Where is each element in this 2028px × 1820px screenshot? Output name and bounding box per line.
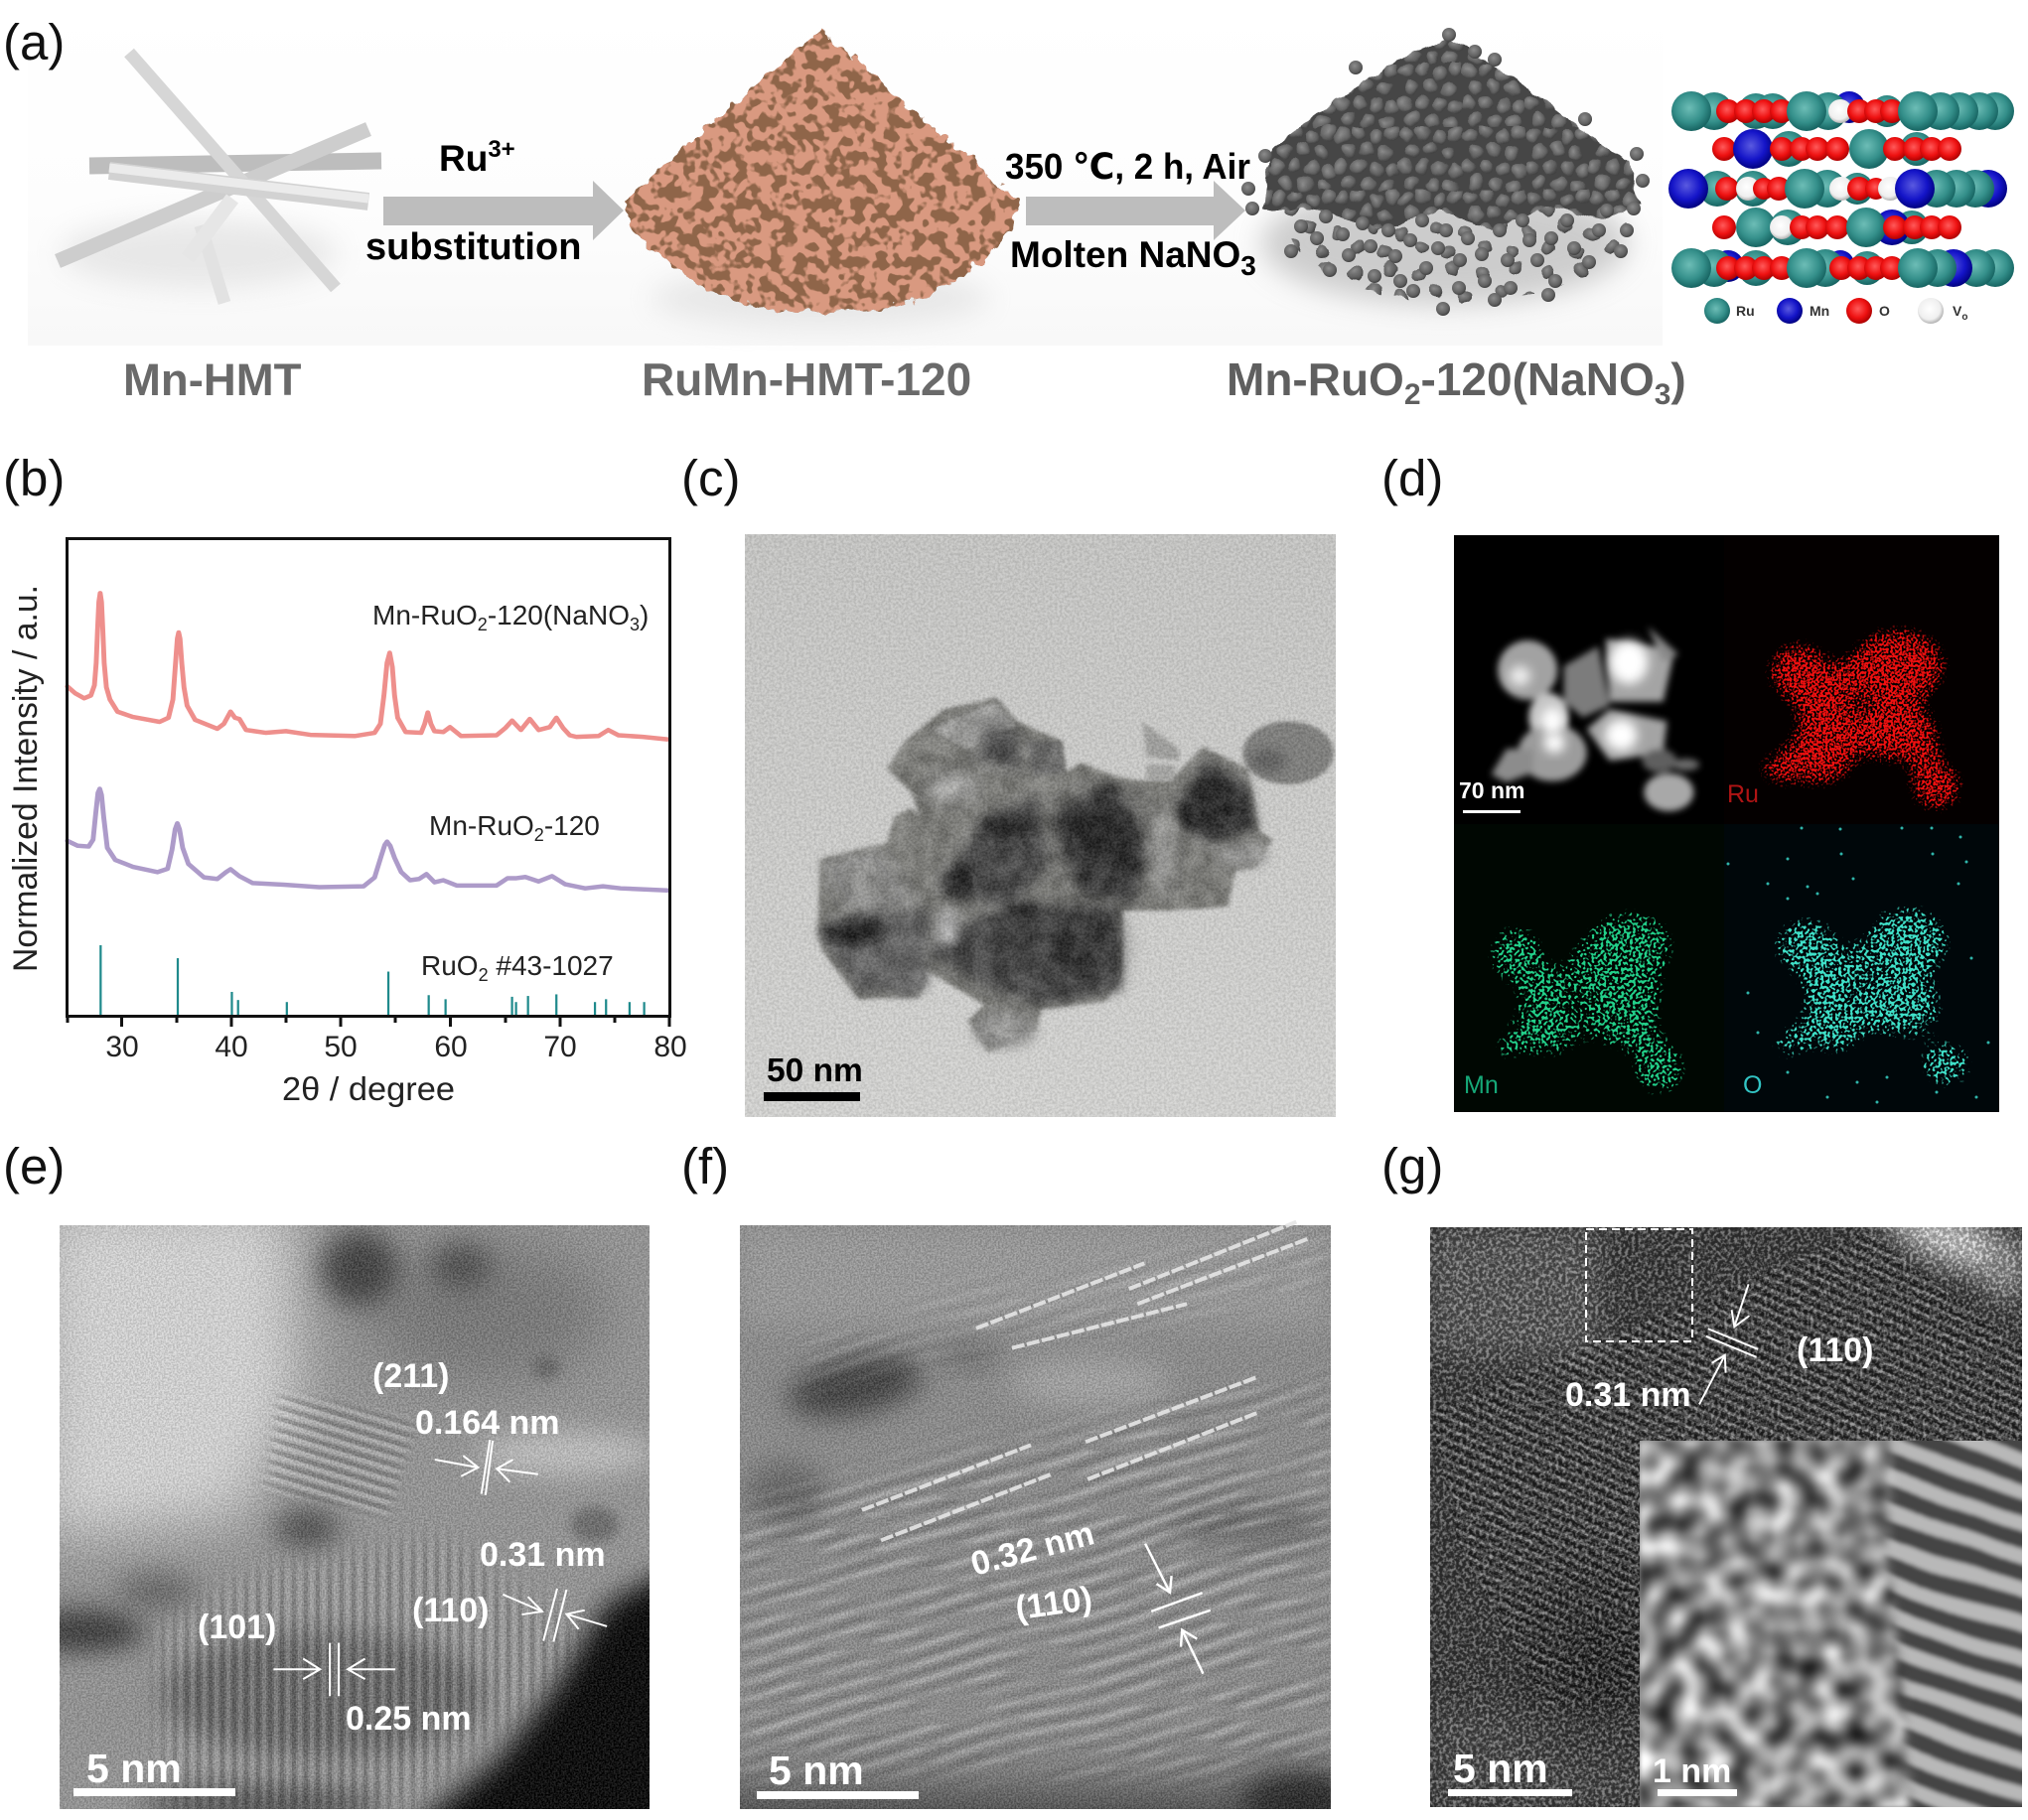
title: RuMn-HMT-120: RuMn-HMT-120 <box>642 353 971 405</box>
series label: Mn-RuO2-120(NaNO3): Mn-RuO <box>372 600 478 630</box>
panel d: elemental mapping <box>1381 450 1999 1112</box>
scale bar: 1 nm: 1 nm <box>1653 1752 1731 1790</box>
label: Molten NaNO3: Molten NaNO <box>1010 234 1240 275</box>
series label: Mn-RuO2-120(NaNO3): ) <box>640 600 649 630</box>
series label: RuO2 #43-1027: 2 <box>479 965 489 985</box>
dark sample edge <box>405 1559 650 1809</box>
annotation: 211 lattice <box>372 1357 560 1495</box>
legend: atoms: V <box>1953 303 1961 319</box>
x axis title: 2θ / degree <box>282 1070 455 1107</box>
map background tints <box>1724 535 1999 824</box>
series label: RuO2 #43-1027: RuO <box>421 950 479 981</box>
annotation: 211 lattice: (211) <box>372 1357 449 1395</box>
panel label f: (f) <box>681 1138 729 1194</box>
panel f: HRTEM image <box>684 1147 1331 1809</box>
lattice fringes <box>740 1384 1331 1781</box>
scale bar: 50 nm: 50 nm <box>767 1052 863 1089</box>
x axis tick labels: 70 <box>543 1031 577 1063</box>
annotation: 110 lattice: 0.31 nm <box>480 1536 606 1574</box>
arrow: calcination <box>1026 181 1245 240</box>
panel label b: (b) <box>3 450 65 506</box>
row 4 <box>1712 208 1961 247</box>
title: Mn-HMT: Mn-HMT <box>123 354 302 405</box>
O map <box>1770 905 1974 1088</box>
arrow: substitution <box>383 181 624 240</box>
legend: atoms: Mn <box>1810 303 1829 319</box>
HRTEM micrograph <box>60 1225 650 1809</box>
scale bar: 5 nm <box>757 1748 919 1799</box>
scale bar: 5 nm: 5 nm <box>769 1748 864 1793</box>
panel e: HRTEM image <box>3 1138 696 1820</box>
row 3 <box>1668 169 2007 209</box>
row 1 <box>1671 91 2014 131</box>
title: Mn-RuO2-120(NaNO3): ) <box>1670 353 1686 405</box>
series label: Mn-RuO2-120: 2 <box>534 825 544 845</box>
annotation: 110 lattice: (110) <box>412 1592 489 1629</box>
y axis title: Normalized Intensity / a.u. <box>7 585 45 972</box>
label: Molten NaNO3: 3 <box>1240 250 1256 281</box>
label: Ru3+: Ru <box>439 138 488 179</box>
legend: atoms: Ru <box>1736 303 1755 319</box>
label: Ru3+: 3+ <box>488 136 515 163</box>
legend: atoms: o <box>1961 312 1967 323</box>
panel label d: (d) <box>1381 450 1443 506</box>
scattered O dots <box>1726 826 1990 1104</box>
annotation: 0.32 nm: 0.32 nm <box>967 1514 1098 1584</box>
series label: Mn-RuO2-120(NaNO3): 2 <box>478 615 488 634</box>
map label: Mn: Mn <box>1464 1071 1499 1099</box>
reference sticks: RuO2 <box>100 945 645 1017</box>
label: 350 C, 2 h, Air: 350 ℃, 2 h, Air <box>1005 146 1250 187</box>
map label: O: O <box>1743 1071 1762 1099</box>
scale bar: 5 nm: 5 nm <box>1453 1746 1548 1791</box>
annotation: 101 lattice <box>198 1609 472 1738</box>
scale bar: 70 nm: 70 nm <box>1459 777 1524 803</box>
curve: Mn-RuO2-120 <box>68 788 667 891</box>
annotation: 110 lattice: 0.31 nm <box>1565 1376 1691 1414</box>
lattice fringes: 211 <box>263 1394 415 1517</box>
x axis tick labels: 50 <box>324 1031 358 1063</box>
legend: atoms <box>1704 298 1967 324</box>
panel b: XRD chart <box>3 450 687 1107</box>
TEM micrograph <box>745 534 1336 1117</box>
HRTEM micrograph <box>1430 1185 2026 1807</box>
annotation: 110: (110) <box>1013 1580 1094 1627</box>
annotation: lattice arrows <box>1145 1544 1211 1674</box>
panel g: HRTEM image with inset <box>1381 1138 2028 1820</box>
Mn map <box>1487 909 1688 1098</box>
legend: atoms: O <box>1879 303 1890 319</box>
annotation: 101 lattice: 0.25 nm <box>346 1700 472 1738</box>
series label: Mn-RuO2-120(NaNO3): 3 <box>630 615 640 634</box>
panel a: synthesis scheme <box>3 4 2014 411</box>
panel label g: (g) <box>1381 1138 1443 1194</box>
annotation: 101 lattice: (101) <box>198 1609 276 1646</box>
inset: magnified lattice <box>1640 1441 2022 1807</box>
title: Mn-RuO2-120(NaNO3): -120(NaNO <box>1421 353 1655 405</box>
HAADF image <box>1492 627 1699 811</box>
annotation: 110 lattice: (110) <box>1797 1331 1873 1369</box>
title: Mn-RuO2-120(NaNO3): 3 <box>1655 378 1670 411</box>
icon: Mn-HMT rods <box>58 53 381 303</box>
Ru map <box>1759 629 1963 810</box>
panel label a: (a) <box>3 14 65 70</box>
annotation: 110 lattice <box>412 1536 607 1641</box>
mapping images <box>1454 535 1999 1112</box>
icon: crystal structure model <box>1668 91 2014 288</box>
x axis tick labels: 30 <box>105 1031 139 1063</box>
x axis tick labels: 40 <box>215 1031 248 1063</box>
row 2 <box>1712 129 1961 169</box>
dashed fringe markers <box>862 1222 1308 1540</box>
panel c: TEM image <box>681 450 1336 1117</box>
series label: RuO2 #43-1027: #43-1027 <box>489 950 614 981</box>
label: substitution: substitution <box>365 226 581 268</box>
row 5 <box>1671 248 2014 288</box>
scale bar: 5 nm <box>1448 1746 1572 1796</box>
series label: Mn-RuO2-120: -120 <box>544 810 600 841</box>
map label: Ru: Ru <box>1727 780 1759 808</box>
x axis tick labels: 60 <box>434 1031 468 1063</box>
scale bar: 5 nm: 5 nm <box>86 1746 182 1791</box>
curve: Mn-RuO2-120(NaNO3) <box>68 593 667 740</box>
panel label c: (c) <box>681 450 740 506</box>
annotation: 110 lattice <box>1565 1284 1873 1414</box>
scheme backdrop <box>28 4 1663 346</box>
icon: RuMn-HMT porous cone <box>624 30 1019 328</box>
icon: Mn-RuO2 sphere pile <box>1241 28 1650 316</box>
x axis tick labels: 80 <box>653 1031 687 1063</box>
lattice fringes: 101 <box>161 1537 570 1809</box>
annotation: 211 lattice: 0.164 nm <box>415 1404 560 1442</box>
plot frame and ticks <box>68 538 669 1027</box>
x axis tick labels <box>105 1031 687 1063</box>
dashed selection box <box>1586 1229 1692 1341</box>
panel label e: (e) <box>3 1138 65 1194</box>
title: Mn-RuO2-120(NaNO3): Mn-RuO <box>1227 353 1404 405</box>
series label: Mn-RuO2-120: Mn-RuO <box>429 810 534 841</box>
series label: Mn-RuO2-120(NaNO3): -120(NaNO <box>488 600 630 630</box>
title: Mn-RuO2-120(NaNO3): 2 <box>1404 378 1421 411</box>
scale bar: 5 nm <box>73 1746 235 1796</box>
HRTEM micrograph <box>740 1225 1331 1809</box>
